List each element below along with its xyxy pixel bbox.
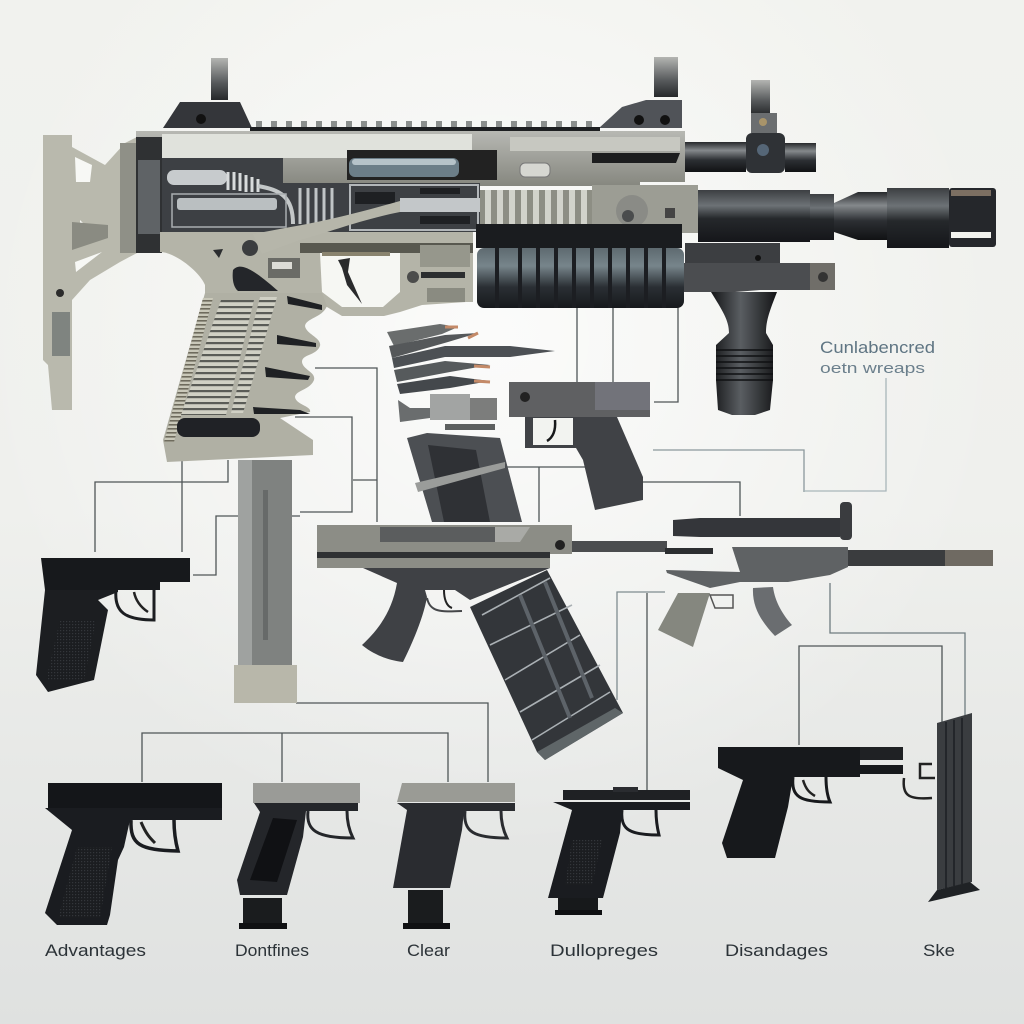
lower receiver bbox=[160, 201, 473, 316]
rifle magazine bbox=[407, 433, 623, 760]
long vertical magazine bbox=[234, 460, 297, 703]
caption: disandages: Disandages bbox=[725, 942, 828, 960]
small pistol bbox=[509, 382, 650, 510]
ammunition bbox=[387, 324, 555, 430]
front sight bbox=[599, 57, 682, 128]
side callout label bbox=[820, 338, 935, 377]
caption: advantages: Advantages bbox=[45, 942, 146, 960]
pistol with magazine: size bbox=[904, 713, 980, 902]
vertical foregrip bbox=[711, 292, 777, 415]
pistol: dullopreges bbox=[548, 787, 690, 915]
centre carbine bbox=[317, 525, 667, 662]
pistol: clear bbox=[393, 783, 515, 929]
caption: downtimes: Dontfines bbox=[235, 942, 309, 960]
barrel and muzzle bbox=[698, 188, 996, 248]
side callout label: Cunlabencred bbox=[820, 338, 935, 357]
rear sight bbox=[163, 58, 252, 128]
pistol: downtimes bbox=[237, 783, 360, 929]
pistol: disadvantages bbox=[718, 747, 903, 858]
connector lines bbox=[95, 228, 965, 790]
under barrel tube bbox=[476, 224, 684, 308]
forward rail and bracket bbox=[684, 243, 835, 292]
top scope bbox=[685, 80, 816, 173]
grip bbox=[163, 293, 327, 462]
caption: clear: Clear bbox=[407, 942, 451, 960]
right rifle bbox=[658, 502, 993, 647]
internal mechanism bbox=[162, 158, 480, 232]
caption: dullopreges: Dullopreges bbox=[550, 942, 658, 960]
handguard rail bbox=[480, 185, 698, 233]
main rifle bbox=[43, 57, 996, 462]
side callout label: oetn wreaps bbox=[820, 360, 925, 377]
top rail bbox=[250, 124, 600, 131]
pistol: left bbox=[36, 558, 190, 692]
upper receiver bbox=[136, 131, 685, 253]
pistol: advantages bbox=[45, 783, 222, 925]
caption: size: Ske bbox=[923, 942, 955, 960]
stock bbox=[43, 135, 137, 410]
